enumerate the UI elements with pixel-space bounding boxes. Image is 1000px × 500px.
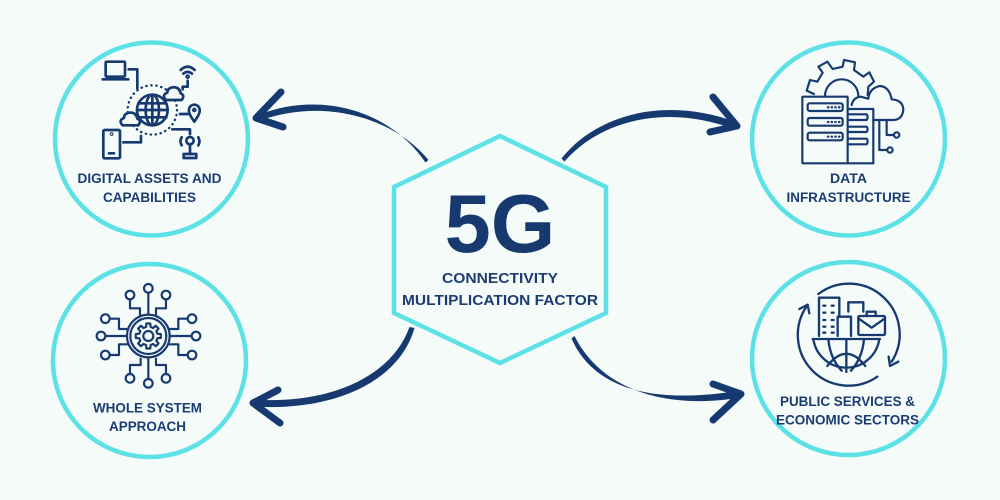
label: digital assets: CAPABILITIES <box>103 190 196 205</box>
panel: public services and economic sectors <box>752 262 945 455</box>
label: public services <box>776 394 919 428</box>
label: public services: PUBLIC SERVICES & <box>780 394 915 409</box>
hexagon caption: CONNECTIVITY <box>442 270 558 287</box>
label: whole system <box>93 400 202 434</box>
label: data infrastructure: DATA <box>830 171 867 186</box>
label: whole system: WHOLE SYSTEM <box>93 400 202 416</box>
label: digital assets <box>78 171 222 205</box>
circle outline <box>53 264 246 457</box>
arrow: to data infrastructure <box>562 97 737 162</box>
circle outline <box>752 262 945 455</box>
arrow: to digital assets <box>256 92 428 162</box>
circle outline <box>752 42 945 236</box>
hexagon caption: MULTIPLICATION FACTOR <box>402 292 598 309</box>
label: data infrastructure: INFRASTRUCTURE <box>786 190 911 205</box>
arrow: to public services <box>572 336 741 420</box>
panel: data infrastructure <box>752 42 945 236</box>
panel: digital assets and capabilities <box>55 42 248 236</box>
hexagon caption <box>402 270 598 309</box>
icon: city, briefcase and globe <box>798 284 900 386</box>
icon: network globe <box>103 62 200 158</box>
panel: whole system approach <box>53 264 246 457</box>
label: digital assets: DIGITAL ASSETS AND <box>78 171 222 186</box>
hexagon outline <box>394 136 606 363</box>
heading: 5G: 5G <box>445 177 555 270</box>
panel: central hexagon <box>394 136 606 363</box>
label: public services: ECONOMIC SECTORS <box>776 412 919 428</box>
arrow: to whole system approach <box>253 327 414 423</box>
label: whole system: APPROACH <box>109 419 186 434</box>
label: data infrastructure <box>786 171 911 205</box>
icon: gear circuit <box>97 284 200 388</box>
circle outline <box>55 42 248 236</box>
icon: servers, gear and cloud <box>802 60 903 163</box>
